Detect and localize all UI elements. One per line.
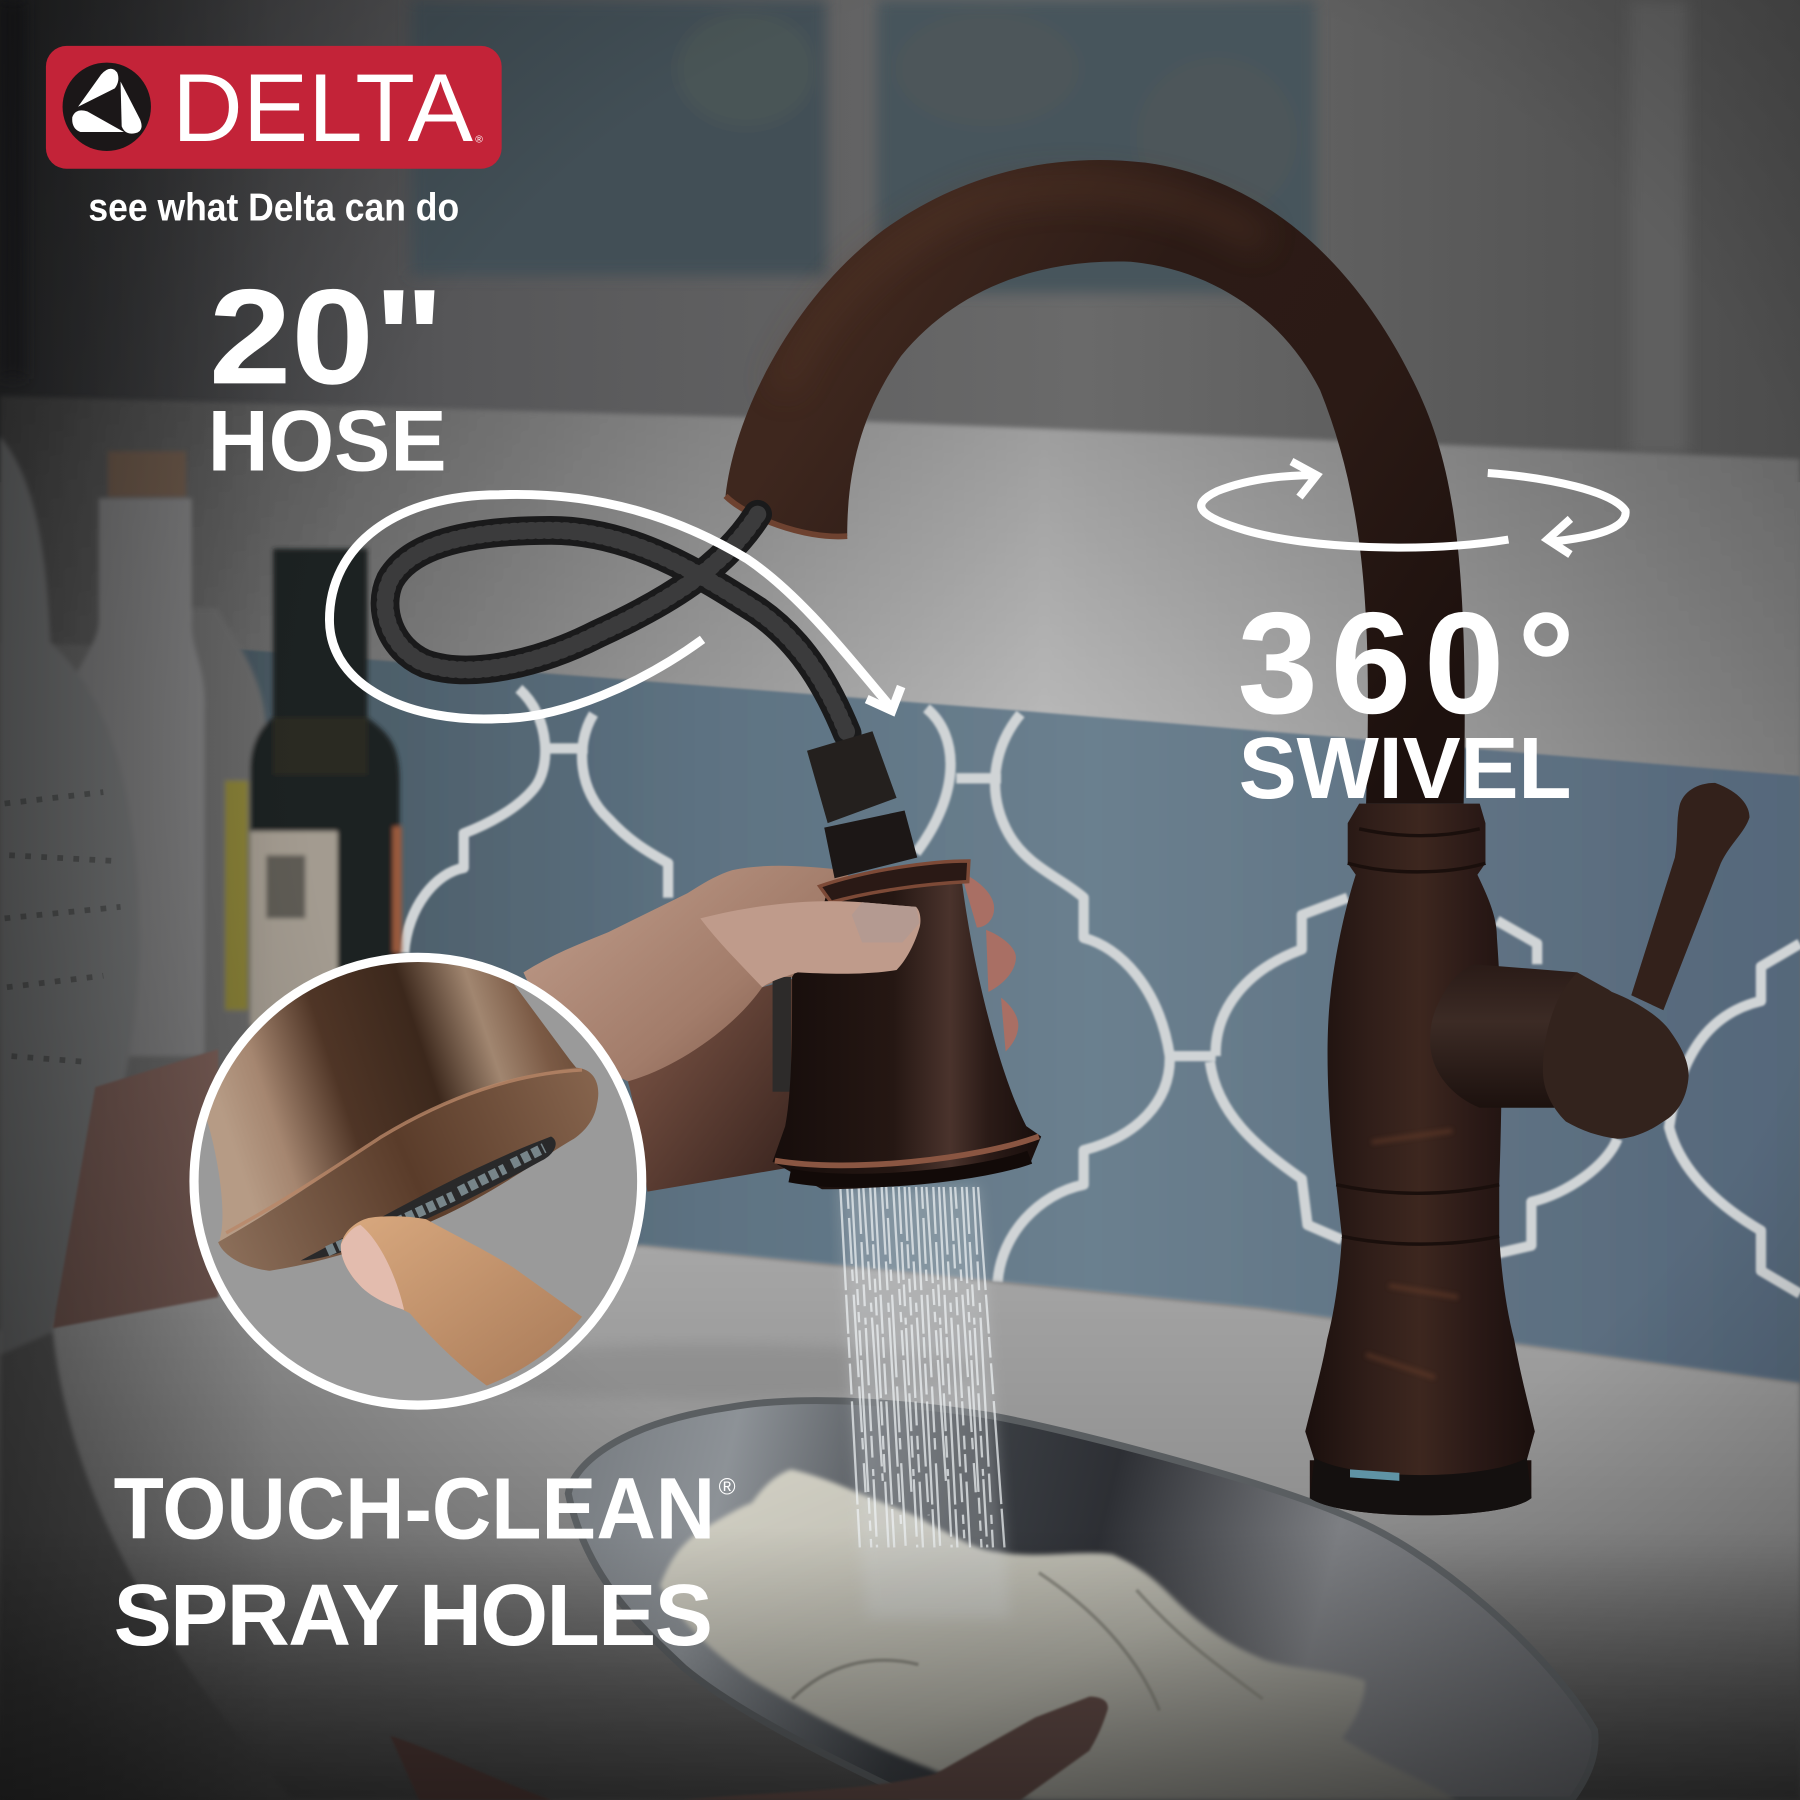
heading: 360 swivel: 360° — [1238, 582, 1575, 744]
thumb — [700, 901, 920, 987]
inset rim — [218, 1068, 598, 1271]
hands at bottom — [390, 1697, 1108, 1800]
spout highlight — [781, 187, 1263, 390]
heading: 20 inch hose: 20" — [209, 260, 444, 412]
handle cylinder — [1430, 964, 1577, 1108]
brand logo: ® — [475, 134, 483, 145]
left arrow head — [1291, 461, 1317, 497]
back of hand — [523, 866, 872, 1081]
heading: 360 swivel: SWIVEL — [1239, 720, 1572, 817]
hose length arrow — [329, 494, 901, 719]
bottom shade — [0, 1527, 1800, 1800]
hand holding spray head — [523, 866, 1018, 1192]
mixing bowl — [568, 1401, 1595, 1800]
spout arc — [726, 160, 1465, 804]
heading: touch-clean spray holes: TOUCH-CLEAN — [114, 1460, 715, 1557]
status light — [1350, 1469, 1399, 1481]
cloth lace texture — [5, 792, 121, 1062]
heading: 20 inch hose: HOSE — [208, 394, 447, 490]
trigger — [773, 977, 791, 1092]
logo mark — [63, 63, 151, 151]
arrow head — [867, 686, 901, 711]
frosting — [660, 1469, 1457, 1800]
inset: touch-clean detail — [194, 941, 642, 1405]
body rings — [1336, 829, 1499, 1244]
base ring — [1310, 1458, 1531, 1515]
blurred bottles and cloth — [0, 436, 402, 1800]
countertop — [0, 1246, 1800, 1800]
collar neck — [824, 810, 917, 878]
arm — [53, 1049, 218, 1328]
fingernail — [341, 1225, 404, 1310]
water spray — [840, 1187, 1010, 1619]
finger — [341, 1216, 582, 1386]
heading: 20 inch hose — [208, 260, 447, 490]
handle lever — [1631, 783, 1749, 1010]
tile grout lines — [404, 689, 1800, 1294]
counter shadow under inset — [436, 1344, 987, 1399]
window panes — [0, 0, 1688, 453]
upper wall — [0, 0, 1800, 482]
top rim — [820, 861, 969, 902]
tile backsplash — [230, 649, 1800, 1383]
heading: touch-clean spray holes — [114, 1460, 736, 1664]
palm shadow — [628, 976, 804, 1192]
bell — [773, 872, 1041, 1189]
heading: touch-clean spray holes: SPRAY HOLES — [114, 1567, 713, 1664]
pull-down hose — [385, 514, 847, 734]
spray head — [700, 731, 1041, 1189]
handle knob — [1543, 972, 1689, 1139]
wordmark: DELTA — [172, 55, 474, 162]
tagline: see what Delta can do — [88, 186, 459, 229]
copper wear streaks — [1366, 1131, 1458, 1378]
hose collar — [807, 731, 897, 823]
swivel arrows — [1201, 461, 1626, 554]
spray nozzles — [301, 1136, 556, 1260]
faucet body — [726, 160, 1749, 1515]
thumbnail — [852, 902, 920, 942]
base column — [1305, 804, 1535, 1515]
fingers behind head — [961, 872, 1018, 1052]
heading: 360 swivel — [1238, 582, 1575, 817]
spout tip — [726, 496, 847, 536]
brand logo — [46, 46, 502, 169]
inset spray head — [207, 962, 576, 1244]
bottom rim — [790, 1157, 1030, 1181]
light wall band — [0, 396, 1800, 781]
heading: touch-clean spray holes: ® — [719, 1474, 736, 1500]
right arrow head — [1547, 519, 1570, 554]
